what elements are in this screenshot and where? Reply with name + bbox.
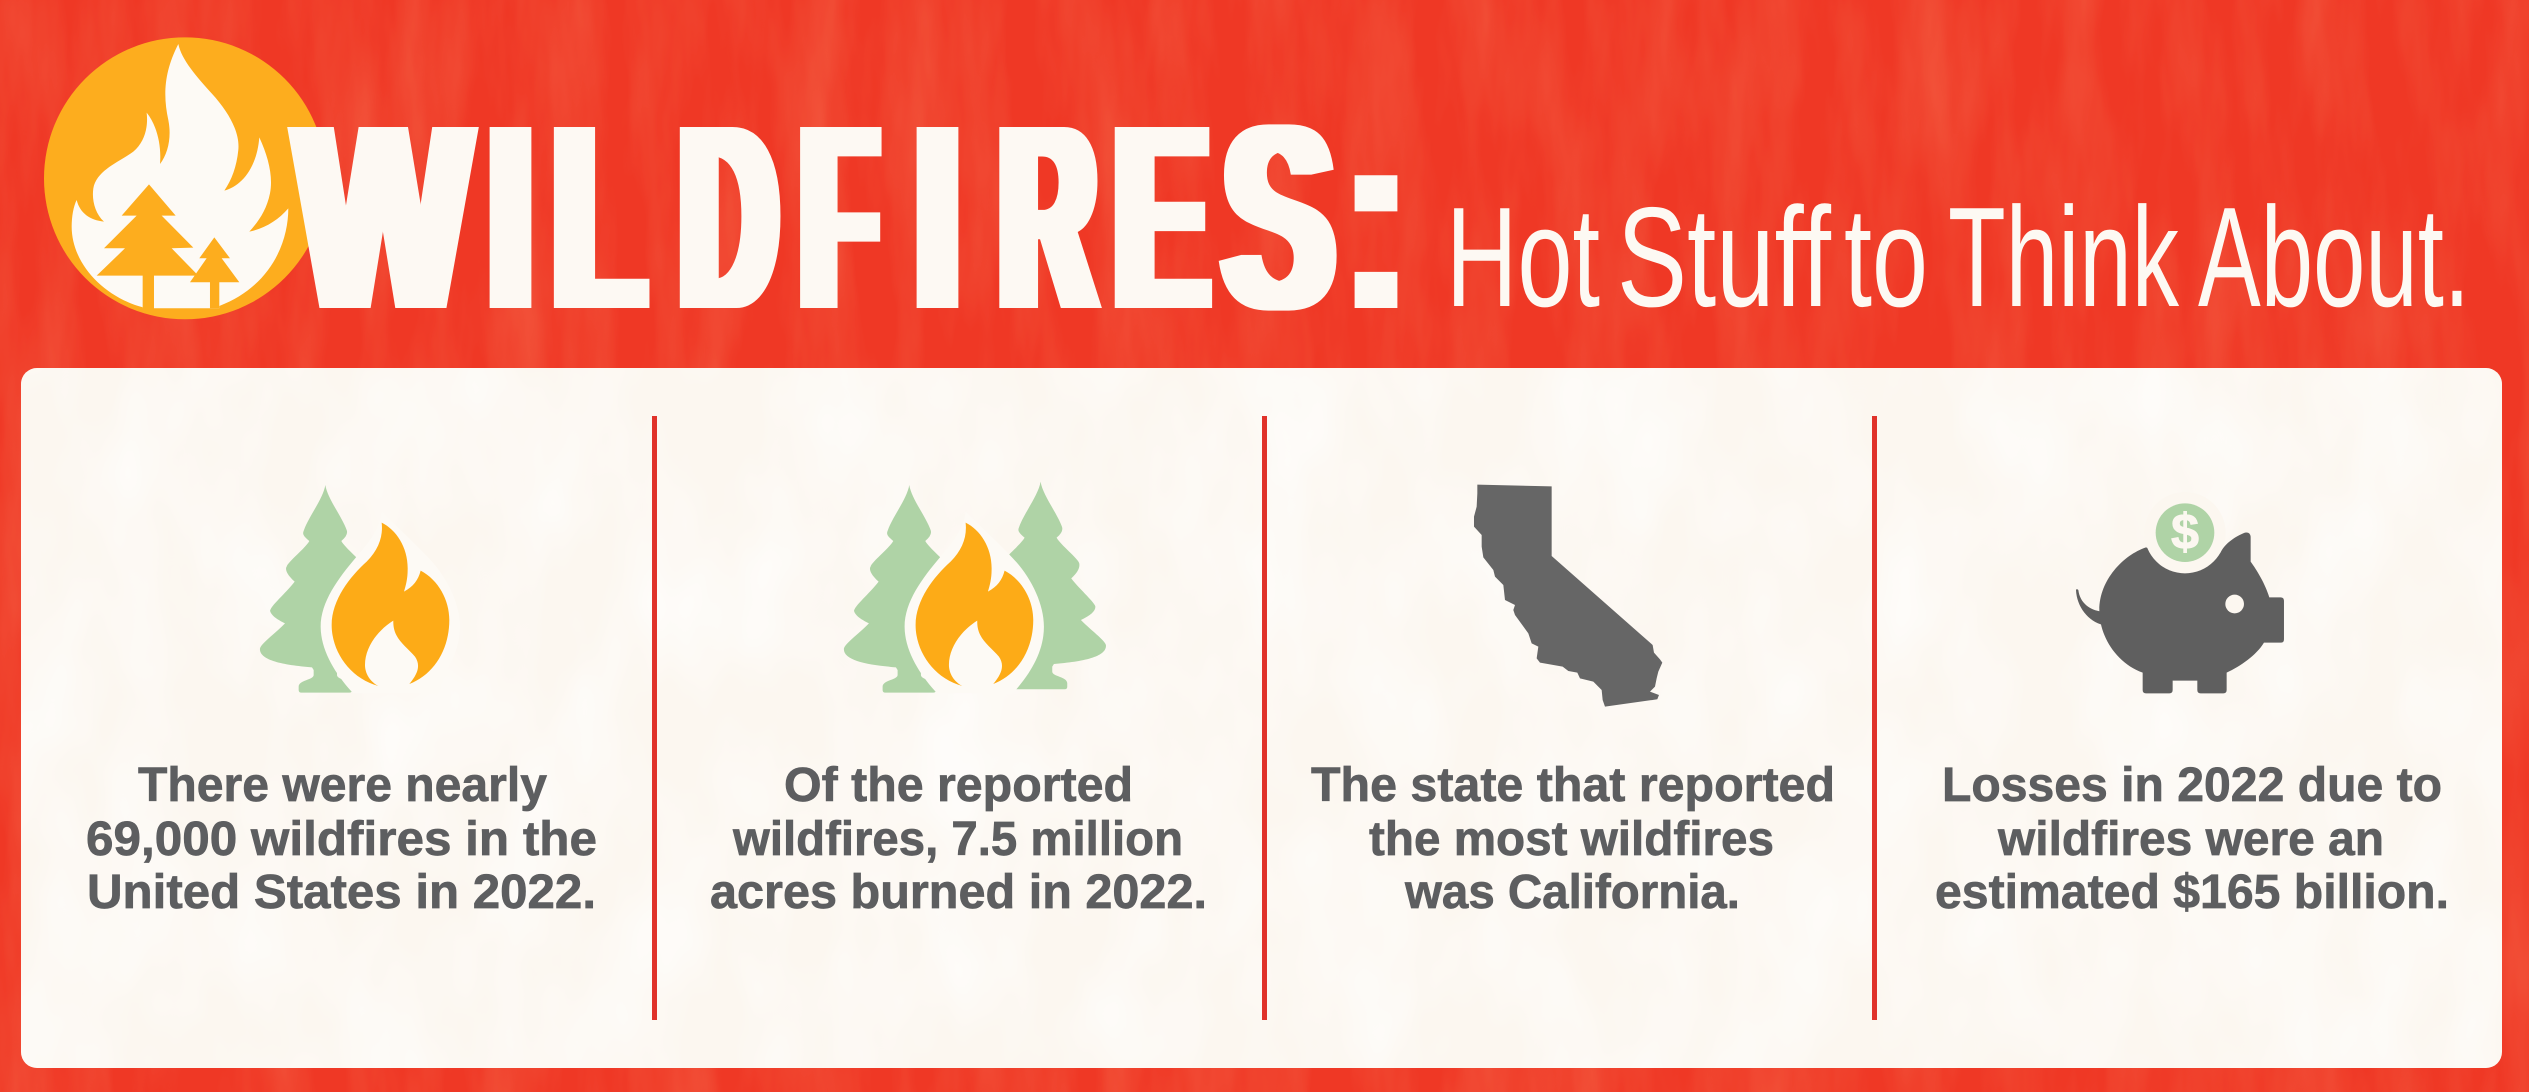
title: WILDFIRES: I	[490, 70, 532, 364]
icon: two pine trees with flame	[844, 482, 1106, 693]
icon: map of California	[1474, 485, 1662, 707]
text: state with most wildfires: The state that reported	[1311, 759, 1835, 812]
title: WILDFIRES: D	[681, 70, 776, 364]
panel: white statistics card	[21, 368, 2502, 1068]
subtitle: Hot Stuff to Think About.: Hot	[1446, 178, 1600, 337]
icon: pine tree with flame	[260, 485, 460, 693]
title: WILDFIRES: :	[1349, 70, 1403, 364]
subtitle: Hot Stuff to Think About.: Think	[1948, 178, 2180, 337]
text: 7.5 million acres burned: Of the reported	[784, 759, 1133, 812]
text: 7.5 million acres burned: acres burned in 2022.	[710, 866, 1207, 919]
icon: piggy bank with coin	[2076, 492, 2284, 693]
title: WILDFIRES: I	[916, 70, 958, 364]
text: state with most wildfires: the most wildfires	[1369, 813, 1774, 866]
text: state with most wildfires: was California.	[1404, 866, 1740, 919]
panel: losses	[1935, 492, 2449, 919]
text: 7.5 million acres burned	[710, 759, 1207, 919]
title: WILDFIRES: W	[297, 70, 471, 364]
title: WILDFIRES: F	[802, 70, 876, 364]
text: 7.5 million acres burned: wildfires, 7.5 million	[732, 813, 1183, 866]
title: WILDFIRES: S	[1224, 70, 1333, 364]
text: nearly 69,000 wildfires: United States in 2022.	[87, 866, 596, 919]
text: $165 billion in losses	[1935, 759, 2449, 919]
text: $165 billion in losses: estimated $165 billion.	[1935, 866, 2449, 919]
title: WILDFIRES: E	[1116, 70, 1208, 364]
icon: piggy bank with coin: $	[2171, 504, 2199, 560]
panel: California	[1311, 485, 1835, 919]
icon: header flame and pine trees badge	[44, 37, 326, 319]
text: state with most wildfires	[1311, 759, 1835, 919]
panel: wildfire count	[86, 485, 597, 919]
text: nearly 69,000 wildfires: 69,000 wildfires in the	[86, 813, 597, 866]
subtitle: Hot Stuff to Think About.: to	[1844, 178, 1928, 337]
text: $165 billion in losses: Losses in 2022 due to	[1942, 759, 2442, 812]
text: nearly 69,000 wildfires	[86, 759, 597, 919]
title: WILDFIRES	[297, 70, 1403, 364]
text: nearly 69,000 wildfires: There were nearly	[138, 759, 547, 812]
panel: acres burned	[710, 482, 1207, 919]
text: $165 billion in losses: wildfires were an	[1997, 813, 2384, 866]
subtitle: Hot Stuff to Think About.: Stuff	[1617, 178, 1831, 337]
title: WILDFIRES: R	[1001, 70, 1095, 364]
title: WILDFIRES: L	[554, 70, 644, 364]
